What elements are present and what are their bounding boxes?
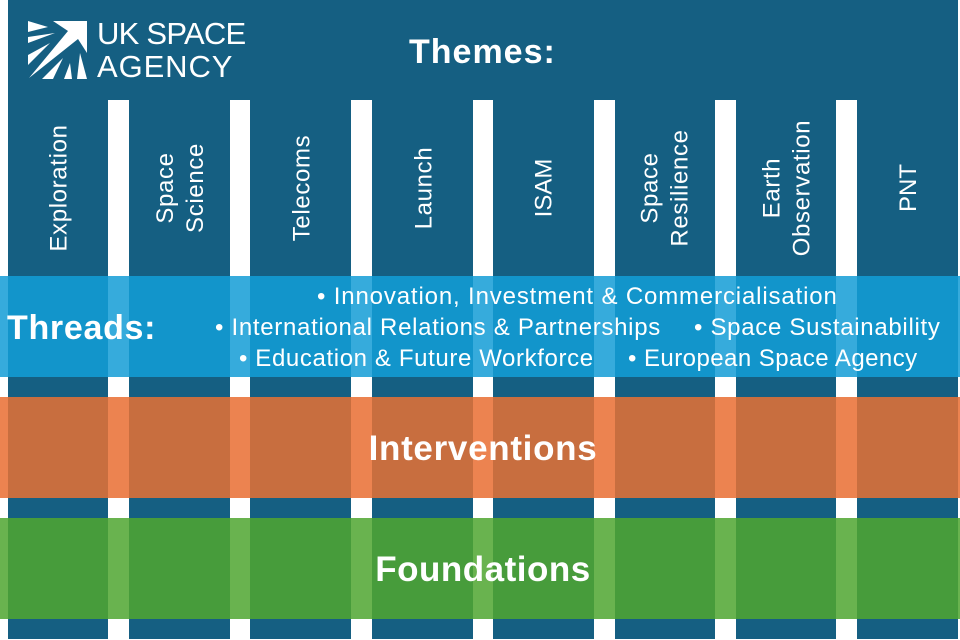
thread: Space Sustainability: • Space Sustainability (694, 314, 941, 341)
theme label: Earth Observation (758, 120, 815, 256)
thread: International Relations: • International Relations & Partnerships (215, 314, 661, 341)
thread: Innovation: • Innovation, Investment & Commercialisation (317, 283, 838, 310)
theme label: Space Resilience: Space (637, 152, 664, 224)
theme label: Space Science: Science (182, 143, 208, 233)
heading: Threads: Threads: (7, 309, 156, 347)
header panel (8, 0, 958, 100)
theme label: Telecoms: Telecoms (289, 135, 316, 241)
theme label: Space Resilience: Resilience (667, 129, 694, 247)
theme label: Space Science (152, 143, 208, 233)
thread: Education: • Education & Future Workforce (239, 345, 594, 372)
heading: Interventions: Interventions (369, 429, 597, 468)
heading: Themes: Themes: (409, 33, 556, 71)
theme label: Earth Observation: Observation (788, 120, 815, 256)
logo: UK Space Agency (28, 16, 245, 84)
thread: European Space Agency: • European Space Agency (628, 345, 918, 372)
panel: interventions (0, 397, 960, 498)
panel: foundations (0, 518, 960, 619)
panel: threads (0, 276, 960, 377)
icon: arrow with rays (28, 21, 87, 79)
theme label: PNT: PNT (895, 164, 922, 212)
theme label: Space Resilience (637, 129, 694, 247)
theme label: Exploration: Exploration (46, 124, 73, 252)
heading: Foundations: Foundations (375, 550, 591, 589)
logo text: AGENCY (97, 49, 233, 84)
logo text: UK SPACE (97, 16, 245, 51)
theme label: Earth Observation: Earth (758, 158, 785, 218)
theme label: ISAM: ISAM (530, 159, 558, 217)
logo text (97, 16, 245, 84)
theme label: Launch: Launch (410, 147, 437, 229)
theme label: Space Science: Space (152, 152, 178, 224)
